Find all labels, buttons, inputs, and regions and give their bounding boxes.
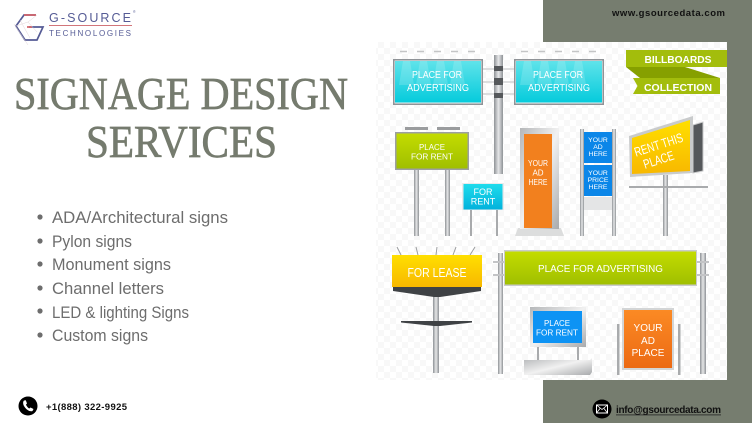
phone number: +1(888) 322-9925 xyxy=(46,402,128,413)
billboard collection image xyxy=(376,42,727,380)
logo wordmark: TECHNOLOGIES xyxy=(49,29,131,38)
title: SERVICES xyxy=(86,116,277,167)
website url: www.gsourcedata.com xyxy=(611,8,725,19)
pylon sign: blue panels: AD xyxy=(593,144,603,151)
totem sign: your ad here orange: AD xyxy=(532,168,544,178)
billboard: place for advertising right: PLACE FOR xyxy=(533,70,583,81)
billboard: place for advertising right: ADVERTISING xyxy=(528,83,590,94)
monument sign: place for rent blue: PLACE xyxy=(544,318,570,328)
sign: place for rent green: FOR RENT xyxy=(411,152,453,162)
long green billboard with poles: PLACE FOR ADVERTISING xyxy=(538,263,663,275)
services bullet list: Channel letters xyxy=(52,280,164,298)
totem sign: your ad here orange: HERE xyxy=(528,178,548,187)
services bullet list: ADA/Architectural signs xyxy=(52,209,228,227)
sign: your ad place orange: AD xyxy=(641,336,655,347)
billboard: place for advertising left xyxy=(393,52,483,105)
ribbon: billboards collection: BILLBOARDS xyxy=(644,54,712,66)
angled billboard: rent this place: PLACE xyxy=(642,149,676,172)
pylon sign: blue panels: HERE xyxy=(589,151,608,158)
angled billboard: rent this place: RENT THIS xyxy=(633,131,685,160)
ribbon: billboards collection xyxy=(626,50,727,94)
services bullet list: Pylon signs xyxy=(52,233,132,251)
monument sign: place for rent blue: FOR RENT xyxy=(536,328,578,338)
sign: for rent cyan: RENT xyxy=(471,196,496,206)
pylon sign: blue panels: PRICE xyxy=(588,177,609,184)
title: SIGNAGE DESIGN xyxy=(14,68,348,119)
phone contact xyxy=(18,396,128,416)
sign: your ad place orange: YOUR xyxy=(634,323,662,334)
billboard: place for advertising left: ADVERTISING xyxy=(407,83,469,94)
logo wordmark: ® xyxy=(133,10,136,14)
logo: G-Source Technologies xyxy=(14,10,136,45)
icon: hexagon G mark xyxy=(14,15,43,45)
totem sign: your ad here orange xyxy=(515,128,564,236)
billboard: place for advertising left: PLACE FOR xyxy=(412,70,462,81)
services bullet list xyxy=(37,209,228,345)
sign: for rent cyan xyxy=(462,183,504,236)
email contact xyxy=(592,400,721,418)
services bullet list: Monument signs xyxy=(52,256,171,274)
billboard: for lease xyxy=(392,247,482,373)
pylon sign: blue panels: YOUR xyxy=(588,137,608,144)
sign: for rent cyan: FOR xyxy=(474,187,493,197)
green side panel xyxy=(543,0,752,423)
monument sign: place for rent blue xyxy=(524,307,592,375)
pylon sign: blue panels: HERE xyxy=(589,184,608,191)
logo wordmark: G-SOURCE xyxy=(49,11,131,25)
pylon sign: blue panels: YOUR xyxy=(588,170,608,177)
services bullet list: Custom signs xyxy=(52,327,148,345)
centre pole with brackets xyxy=(483,55,515,174)
logo wordmark xyxy=(49,10,136,38)
totem sign: your ad here orange: YOUR xyxy=(528,159,548,168)
sign: place for rent green xyxy=(395,127,469,236)
email address: info@gsourcedata.com xyxy=(616,405,721,416)
services bullet list: LED & lighting Signs xyxy=(52,304,189,322)
ribbon: billboards collection: COLLECTION xyxy=(644,82,712,94)
billboard: for lease: FOR LEASE xyxy=(408,266,466,280)
angled billboard: rent this place xyxy=(629,116,708,236)
title xyxy=(14,68,348,167)
icon: envelope xyxy=(592,400,612,418)
sign: place for rent green: PLACE xyxy=(419,142,445,152)
pylon sign: blue panels xyxy=(580,129,616,236)
long green billboard with poles xyxy=(493,250,709,374)
billboard: place for advertising right xyxy=(514,52,604,105)
sign: your ad place orange xyxy=(617,308,680,375)
icon: phone xyxy=(18,396,38,416)
sign: your ad place orange: PLACE xyxy=(632,348,665,359)
